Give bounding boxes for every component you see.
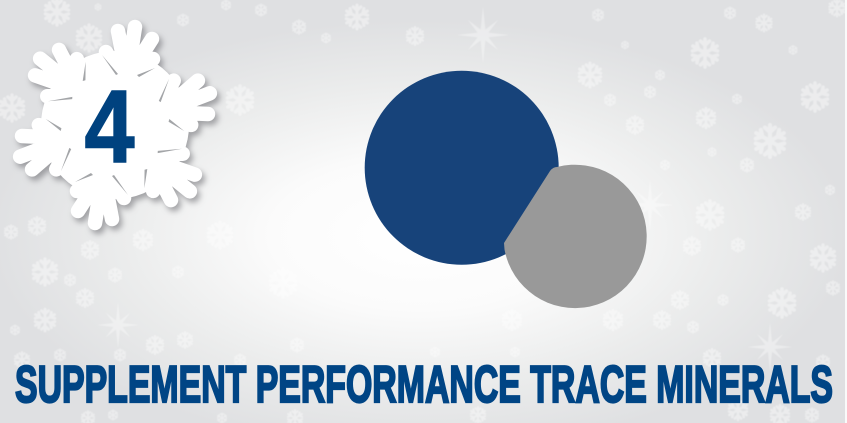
badge number: 4	[84, 69, 134, 184]
badge: large white snowflake	[11, 27, 219, 223]
chart: smaller grey teardrop circle	[504, 165, 647, 308]
chart: large blue circle	[365, 71, 559, 265]
